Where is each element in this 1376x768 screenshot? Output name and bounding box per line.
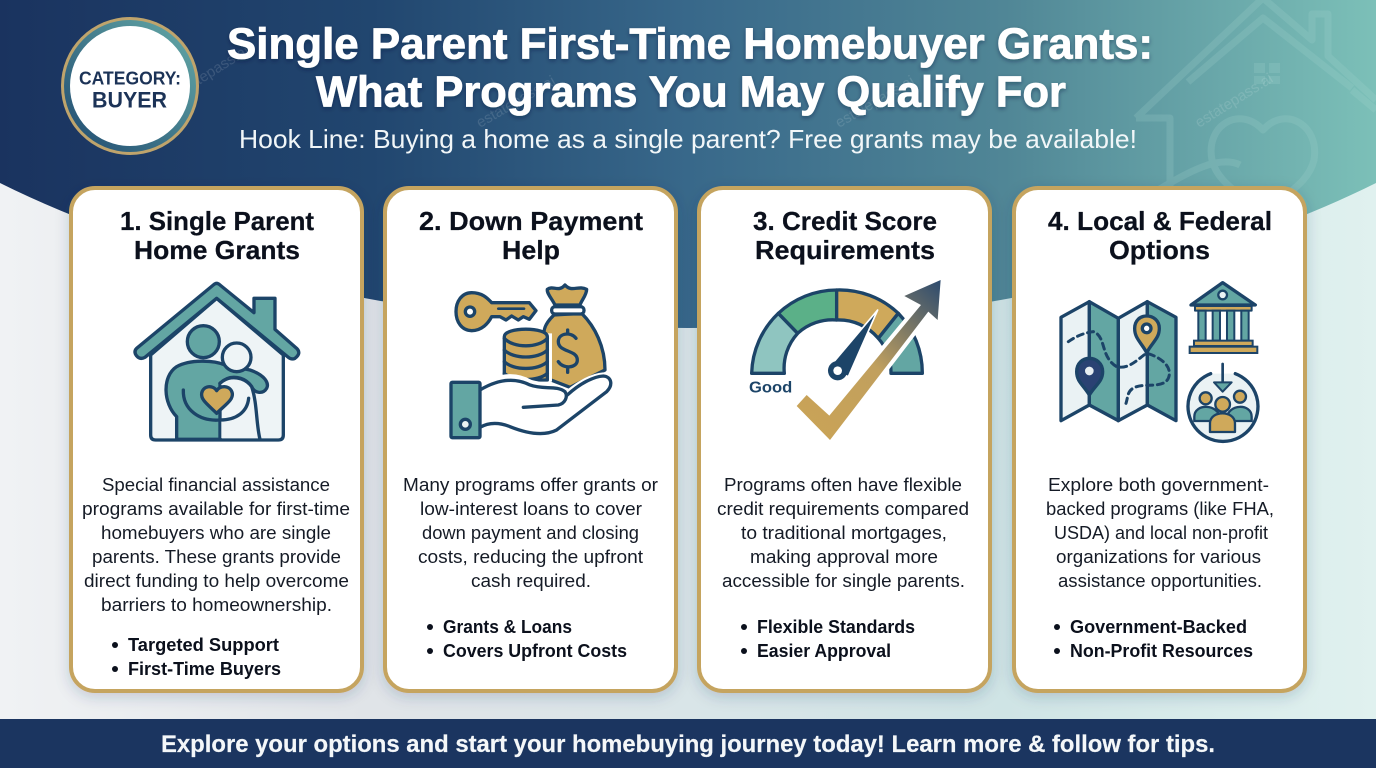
card 1 description: Special financial assistance	[102, 474, 330, 495]
card 3 description	[717, 474, 969, 591]
panel: credit score requirements	[699, 188, 990, 691]
watermark text: estatepass.ai	[474, 73, 559, 131]
card 3 description: accessible for single parents.	[722, 570, 965, 591]
card 1 heading: 1. Single Parent	[120, 206, 314, 236]
watermark text: estatepass.ai	[168, 42, 252, 103]
card 4 heading	[1048, 206, 1272, 265]
card frame 2	[385, 188, 676, 691]
card 4 bullets	[1054, 616, 1253, 661]
card 2 bullets: Grants & Loans	[443, 616, 572, 637]
card frame 4	[1014, 188, 1305, 691]
icon: key, coins, money bag on hand	[451, 285, 611, 438]
card 2 heading: 2. Down Payment	[419, 206, 643, 236]
card 4 bullets: Non-Profit Resources	[1070, 640, 1253, 661]
card 1 description: parents. These grants provide	[92, 546, 341, 567]
icon: credit gauge with check arrow	[749, 280, 941, 440]
category badge	[61, 17, 199, 155]
card 2 bullets	[427, 616, 627, 661]
footer banner: Explore your options and start your homebuying journey today! Learn more & follow for tips.	[161, 731, 1215, 758]
card 2 heading: Help	[502, 235, 560, 265]
card 1 description: programs available for first-time	[82, 498, 350, 519]
card 4 description: backed programs (like FHA,	[1046, 498, 1274, 519]
card 2 description	[403, 474, 658, 591]
title: Single Parent First-Time Homebuyer Grants:	[227, 20, 1153, 68]
card 2 description: down payment and closing	[422, 522, 639, 543]
card 1 description: direct funding to help overcome	[84, 570, 349, 591]
card 4 heading: 4. Local & Federal	[1048, 206, 1272, 236]
card 2 description: costs, reducing the upfront	[418, 546, 643, 567]
card 3 description: credit requirements compared	[717, 498, 969, 519]
card 3 description: making approval more	[750, 546, 938, 567]
card 3 description: to traditional mortgages,	[741, 522, 947, 543]
card 3 heading: 3. Credit Score	[753, 206, 937, 236]
card 4 description: Explore both government-	[1048, 474, 1269, 495]
card 4 description	[1046, 474, 1274, 591]
card 1 description: barriers to homeownership.	[101, 594, 332, 615]
card frame 3	[699, 188, 990, 691]
icon: map, bank and community	[1061, 283, 1258, 441]
icon: family in house	[135, 283, 299, 440]
card 2 description: Many programs offer grants or	[403, 474, 658, 495]
card 3 heading	[753, 206, 937, 265]
card 1 bullets	[112, 634, 281, 679]
card 1 heading: Home Grants	[134, 235, 300, 265]
card 2 heading	[419, 206, 643, 265]
community circle with arrow	[1188, 364, 1258, 441]
decorative house watermark	[1136, 0, 1376, 215]
card 3 bullets: Flexible Standards	[757, 616, 915, 637]
panel: down payment help	[385, 188, 676, 691]
card frame 1	[71, 188, 362, 691]
watermark text	[168, 42, 1276, 131]
card 3 heading: Requirements	[755, 235, 935, 265]
icon: credit gauge with check arrow: Good	[749, 380, 792, 397]
card 1 heading	[120, 206, 314, 265]
header curved band	[0, 0, 1376, 328]
card 3 bullets: Easier Approval	[757, 640, 891, 661]
card 4 heading: Options	[1109, 235, 1210, 265]
footer banner	[0, 719, 1376, 768]
title: What Programs You May Qualify For	[316, 68, 1066, 116]
card 2 description: low-interest loans to cover	[420, 498, 642, 519]
panel: single parent home grants	[71, 188, 362, 691]
category badge: CATEGORY:	[79, 68, 181, 88]
card 4 description: assistance opportunities.	[1058, 570, 1262, 591]
panel: local and federal options	[1014, 188, 1305, 691]
watermark text: estatepass.ai	[832, 73, 918, 131]
card 3 bullets	[741, 616, 915, 661]
card 1 description: homebuyers who are single	[101, 522, 331, 543]
card 4 description: USDA) and local non-profit	[1054, 522, 1268, 543]
card 1 bullets: First-Time Buyers	[128, 658, 281, 679]
card 2 description: cash required.	[471, 570, 591, 591]
title	[227, 20, 1153, 116]
watermark text: estatepass.ai	[1192, 70, 1276, 131]
card 1 bullets: Targeted Support	[128, 634, 280, 655]
card 4 description: organizations for various	[1056, 546, 1261, 567]
card 1 description	[82, 474, 350, 615]
card 2 bullets: Covers Upfront Costs	[443, 640, 627, 661]
card 4 bullets: Government-Backed	[1070, 616, 1247, 637]
map with pins	[1061, 302, 1176, 421]
card 3 description: Programs often have flexible	[724, 474, 962, 495]
hook line: Hook Line: Buying a home as a single parent? Free grants may be available!	[239, 124, 1137, 154]
category badge: BUYER	[92, 88, 167, 112]
bank building	[1190, 283, 1257, 353]
